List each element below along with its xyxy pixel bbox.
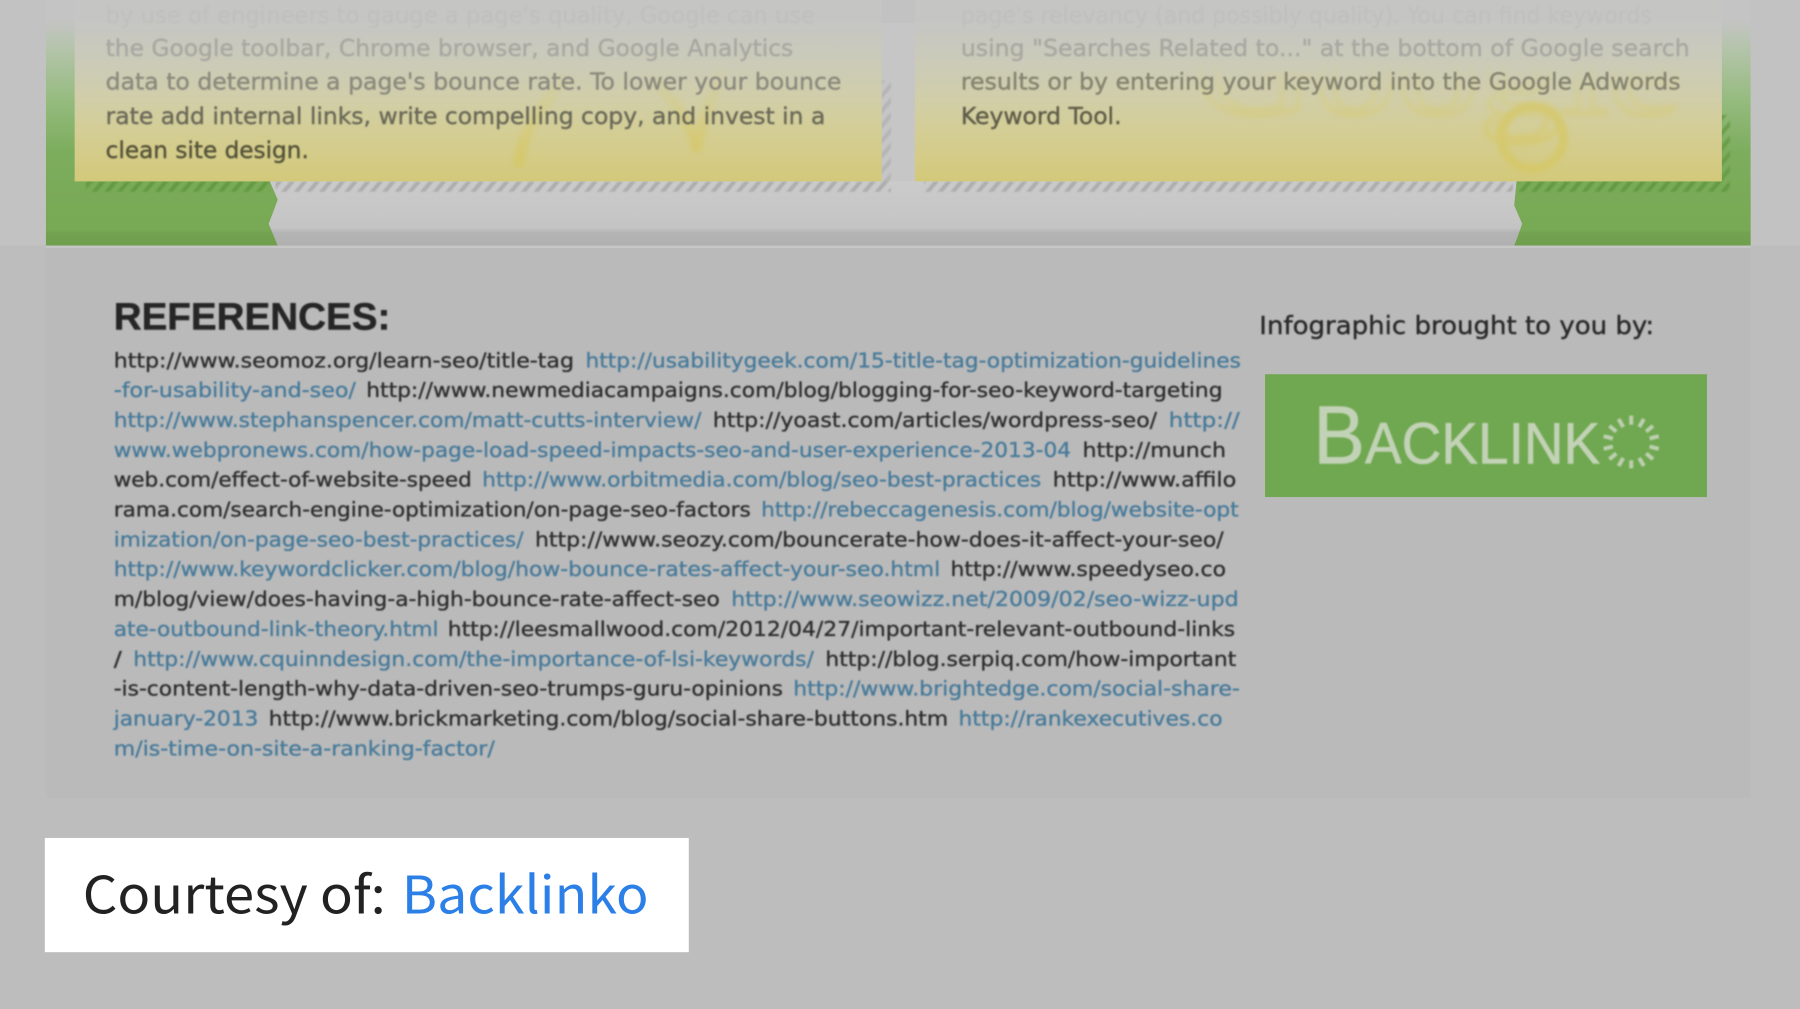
references panel — [46, 246, 1751, 798]
references list: http://munch — [1083, 438, 1226, 462]
references list: http://www.seomoz.org/learn-seo/title-tag — [114, 348, 574, 372]
left card paragraph — [106, 3, 841, 164]
references list: http://www.newmediacampaigns.com/blog/blogging-for-seo-keyword-targeting — [366, 378, 1223, 402]
courtesy text: Courtesy of: — [83, 854, 386, 929]
left card paragraph: rate add internal links, write compelling copy, and invest in a — [106, 104, 825, 130]
left yellow card — [75, 0, 882, 181]
references list: http://leesmallwood.com/2012/04/27/important-relevant-outbound-links — [448, 617, 1235, 641]
right card paragraph — [961, 3, 1690, 130]
references list: m/is-time-on-site-a-ranking-factor/ — [114, 736, 495, 760]
right card paragraph: Keyword Tool. — [961, 104, 1122, 130]
references list: m/blog/view/does-having-a-high-bounce-rate-affect-seo — [114, 587, 720, 611]
infographic crop: bottom of the content section — [0, 0, 1800, 246]
right green ribbon — [1514, 0, 1751, 246]
right card paragraph: using "Searches Related to..." at the bottom of Google search — [961, 36, 1690, 62]
references list: http://www.cquinndesign.com/the-importance-of-lsi-keywords/ — [133, 647, 814, 671]
right yellow card — [915, 0, 1722, 181]
references list: web.com/effect-of-website-speed — [114, 468, 472, 492]
references list: rama.com/search-engine-optimization/on-page-seo-factors — [114, 498, 751, 522]
references list: http://rankexecutives.co — [959, 706, 1223, 730]
faint Google logo in right card — [1194, 0, 1682, 169]
faint decorative glyph in left card — [519, 71, 721, 163]
references list: http://usabilitygeek.com/15-title-tag-optimization-guidelines — [585, 348, 1241, 372]
references list: ate-outbound-link-theory.html — [114, 617, 439, 641]
references list: http:// — [1169, 408, 1240, 432]
left card paragraph: the Google toolbar, Chrome browser, and Google Analytics — [106, 36, 793, 62]
references list: -for-usability-and-seo/ — [114, 378, 356, 402]
Backlinko link: Backlinko — [402, 854, 649, 929]
references list: http://yoast.com/articles/wordpress-seo/ — [713, 408, 1157, 432]
references list: http://www.affilo — [1053, 468, 1236, 492]
references list: http://blog.serpiq.com/how-important — [825, 647, 1236, 671]
references list — [113, 348, 1241, 760]
hatched shadow under right card — [924, 115, 1730, 192]
references list: -is-content-length-why-data-driven-seo-trumps-guru-opinions — [114, 677, 783, 701]
references list: http://rebeccagenesis.com/blog/website-opt — [761, 498, 1239, 522]
references list: january-2013 — [113, 706, 258, 730]
references list: http://www.speedyseo.co — [951, 557, 1226, 581]
references list: www.webpronews.com/how-page-load-speed-impacts-seo-and-user-experience-2013-04 — [114, 438, 1071, 462]
right card paragraph: results or by entering your keyword into the Google Adwords — [961, 70, 1681, 96]
references list: http://www.orbitmedia.com/blog/seo-best-practices — [482, 468, 1041, 492]
references list: / — [114, 647, 122, 671]
grey torn paper strip — [269, 181, 1522, 246]
references list: http://www.stephanspencer.com/matt-cutts-interview/ — [114, 408, 702, 432]
references list: http://www.seozy.com/bouncerate-how-does-it-affect-your-seo/ — [535, 527, 1224, 551]
Backlinko logo — [1265, 374, 1707, 497]
references list: http://www.brightedge.com/social-share- — [793, 677, 1240, 701]
logo sunburst — [1604, 416, 1659, 468]
brought to you by label: Infographic brought to you by: — [1259, 311, 1654, 340]
left card paragraph: data to determine a page's bounce rate. To lower your bounce — [106, 70, 841, 96]
hatched shadow under left card — [86, 80, 891, 192]
logo wordmark: BACKLINK — [1313, 389, 1600, 482]
references list: http://www.brickmarketing.com/blog/social-share-buttons.htm — [269, 706, 948, 730]
left card paragraph: clean site design. — [106, 138, 309, 164]
references list: http://www.keywordclicker.com/blog/how-bounce-rates-affect-your-seo.html — [114, 557, 940, 581]
left green ribbon — [46, 0, 278, 246]
references list: imization/on-page-seo-best-practices/ — [114, 527, 524, 551]
right card paragraph: page's relevancy (and possibly quality). You can find keywords — [961, 3, 1652, 29]
references list: http://www.seowizz.net/2009/02/seo-wizz-upd — [731, 587, 1239, 611]
courtesy badge — [45, 838, 689, 952]
references heading: REFERENCES: — [114, 296, 390, 338]
left card paragraph: by use of engineers to gauge a page's quality, Google can use — [106, 3, 815, 29]
